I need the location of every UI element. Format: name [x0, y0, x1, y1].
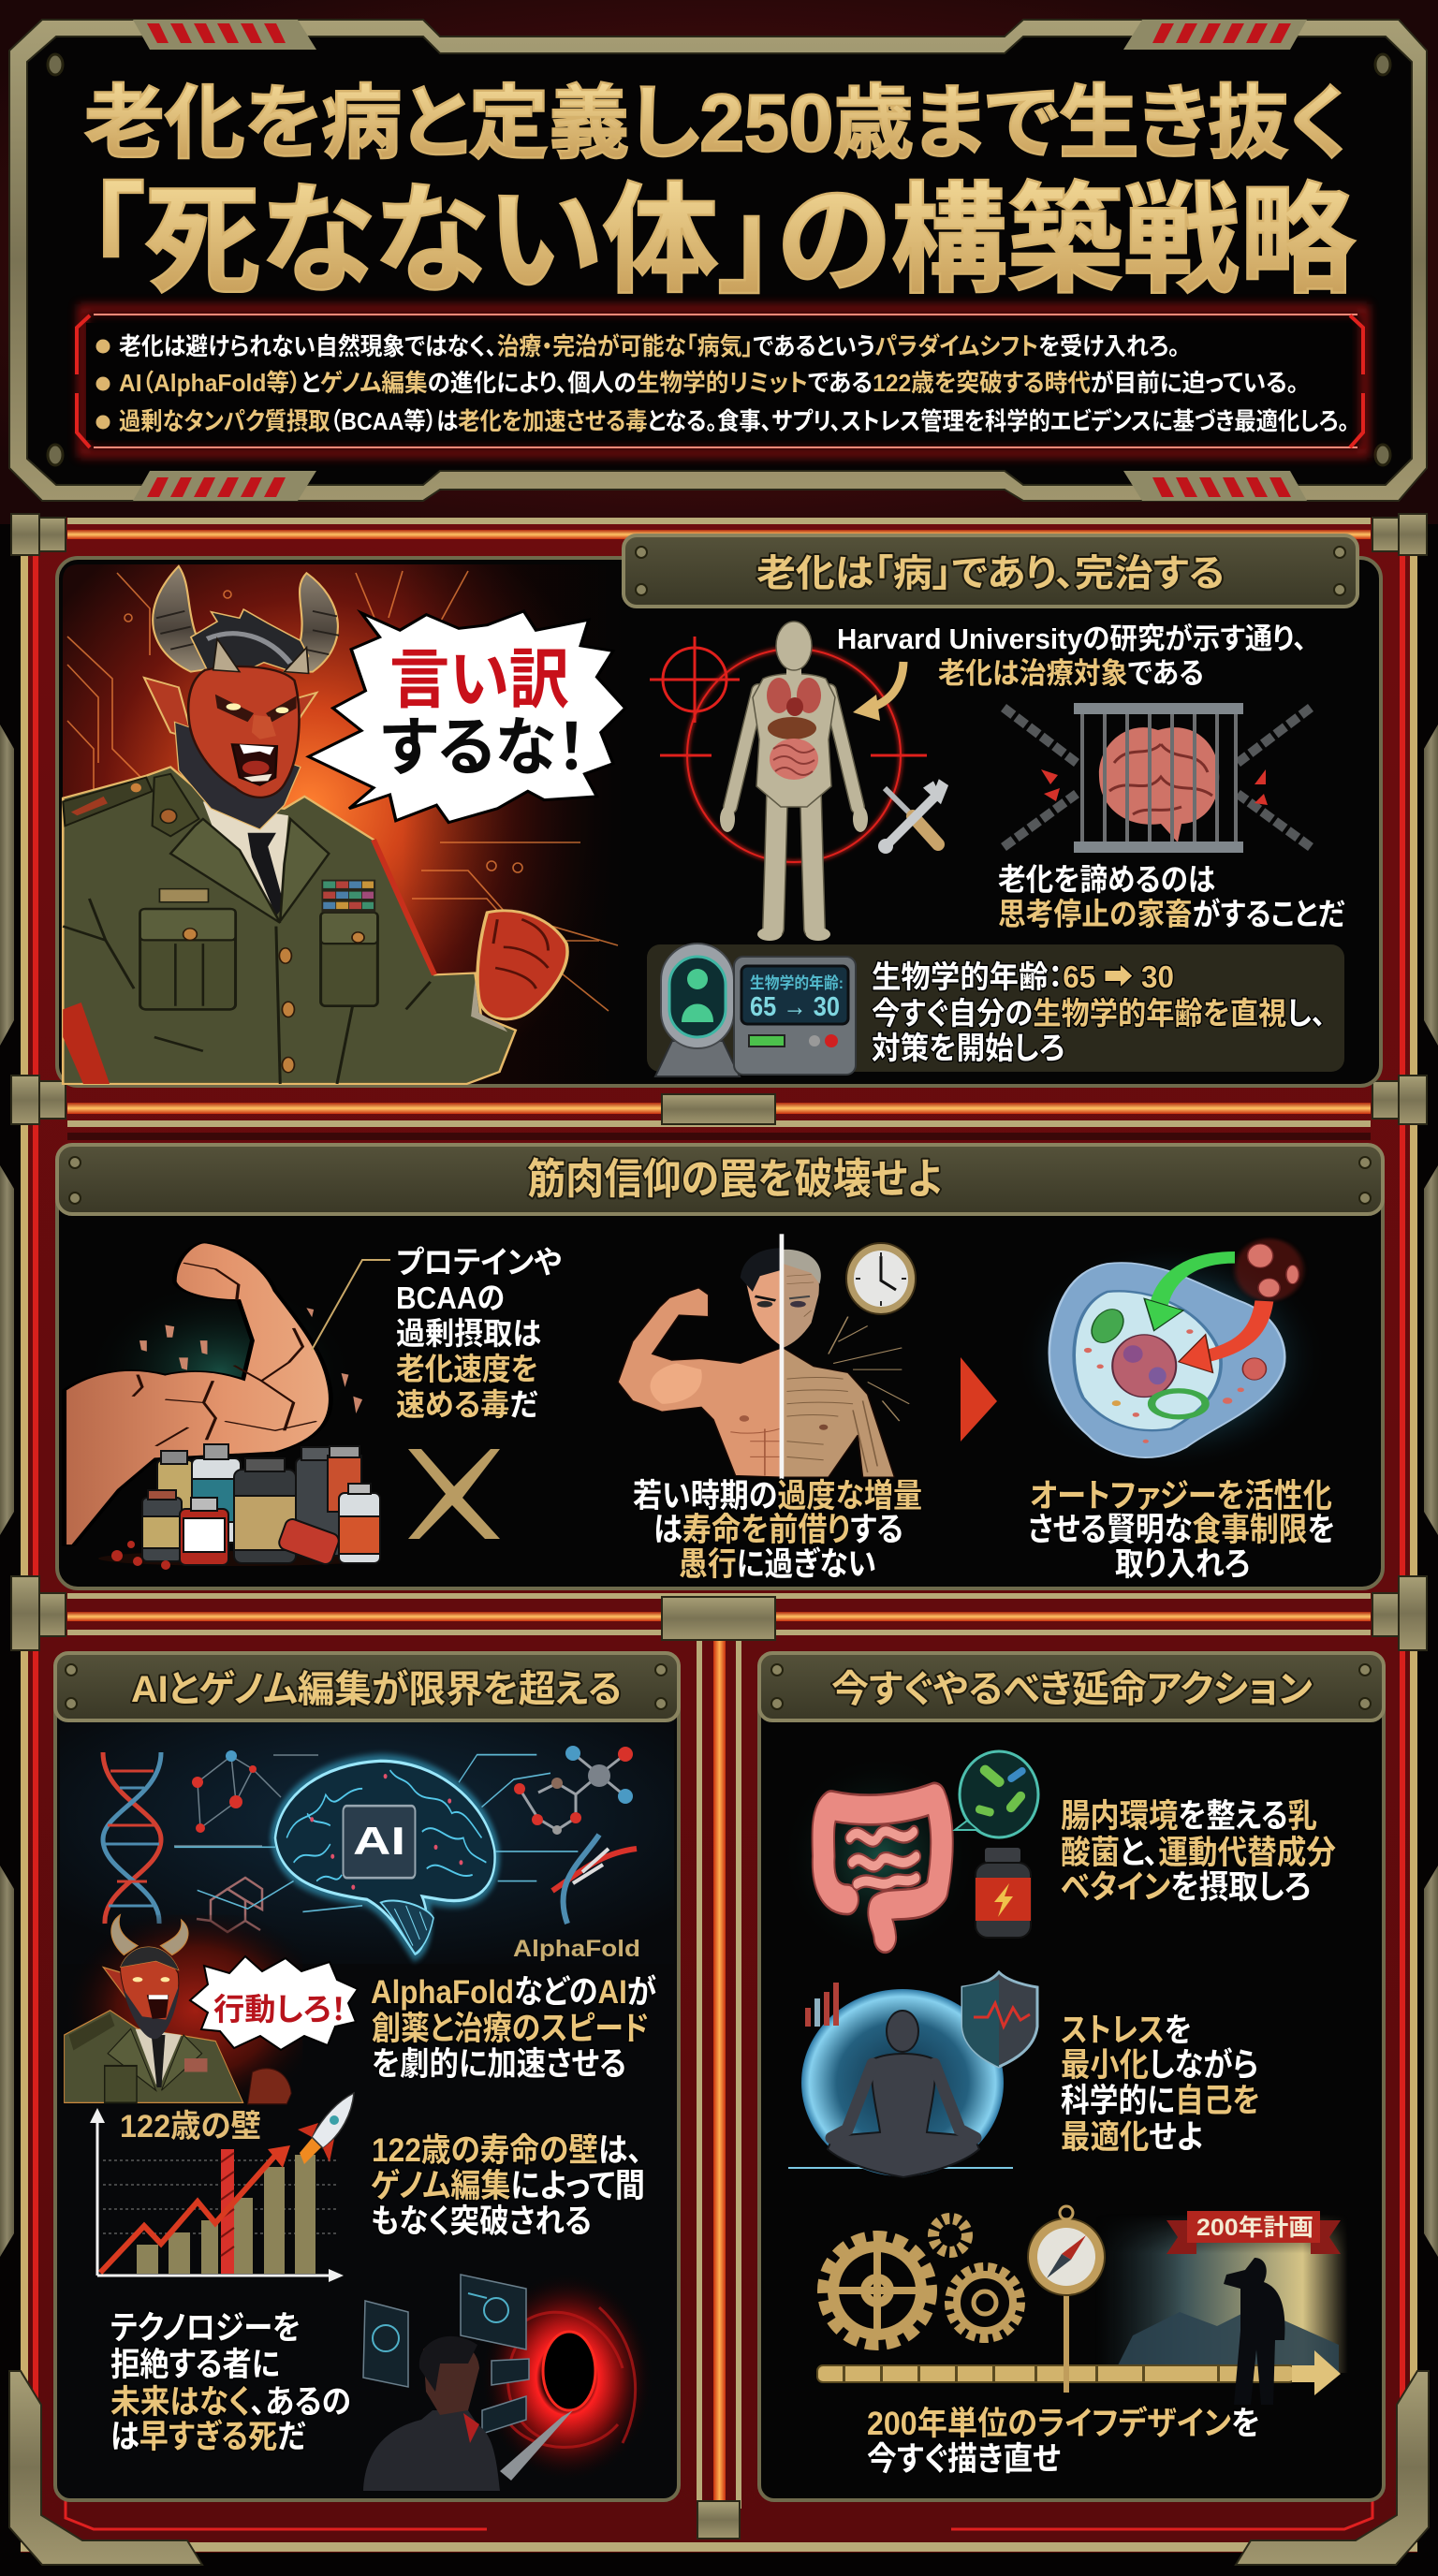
summary box: [77, 309, 1365, 453]
banner: 200-year plan: [1167, 2211, 1341, 2254]
icon: cracking muscular arm: [65, 1243, 362, 1545]
icon: age scanner: 生物学的年齢:: [750, 973, 844, 992]
callout: biological age: [647, 944, 1344, 1076]
beard: [174, 722, 301, 829]
icon: supplement jar: [976, 1848, 1031, 1938]
speech bubble: take action: [190, 1956, 358, 2050]
panel: AI and genome editing: [55, 1653, 679, 2500]
leader line: [312, 1260, 390, 1350]
pockets: [140, 909, 236, 1009]
text: giving up on aging: 思考停止の家畜がすることだ: [998, 897, 1345, 931]
header metal frame: [9, 20, 1427, 501]
text: protein warning: BCAAの: [396, 1281, 505, 1315]
callout: biological age: 対策を開始しろ: [872, 1031, 1064, 1065]
body: [730, 691, 858, 929]
chart: 122-year wall: [90, 2108, 344, 2282]
illustration: landscape timeline: [817, 2206, 1348, 2405]
section heading tab 1: [624, 535, 1357, 607]
section heading tab 1: 老化は「病」であり、完治する: [756, 553, 1225, 594]
icon: age scanner: [655, 944, 856, 1076]
text: Harvard research: [837, 622, 1307, 690]
hazard stripes: [133, 20, 1307, 501]
shirt and tie: [203, 801, 288, 905]
icon: molecules and DNA strand: [514, 1746, 637, 1924]
title: 老化を病と定義し250歳まで生き抜く: [84, 79, 1348, 168]
ai illustration backdrop: [60, 1720, 674, 1964]
text: protein warning: 老化速度を: [396, 1352, 538, 1386]
horns: [153, 566, 213, 672]
icon: molecular network: [174, 1750, 318, 1932]
text: 122 wall: もなく突破される: [371, 2203, 592, 2240]
icon: timeline arrow: [817, 2350, 1341, 2395]
banner: 200-year plan: 200年計画: [1196, 2215, 1313, 2241]
summary box: 老化は避けられない自然現象ではなく、治療・完治が可能な「病気」であるというパラダイムシフトを受け入れろ。: [119, 332, 1180, 360]
text: gut and betaine: 酸菌と、運動代替成分: [1061, 1835, 1336, 1871]
text: 122 wall: [371, 2132, 645, 2240]
text: giving up on aging: [998, 862, 1345, 931]
section heading tab 3: AIとゲノム編集が限界を超える: [131, 1669, 622, 1710]
icon: wall clock: [846, 1243, 916, 1314]
text: gut and betaine: [1061, 1798, 1336, 1906]
frame corner plates: [9, 514, 1429, 2565]
text: rejecting technology: 拒絶する者に: [110, 2347, 280, 2383]
callout: biological age: 生物学的年齢：65 ➡ 30: [872, 959, 1174, 994]
text: AlphaFold speed: を劇的に加速させる: [372, 2046, 626, 2083]
text: caption autophagy: [1028, 1478, 1335, 1583]
fist: [477, 911, 567, 1019]
speech bubble: take action: 行動しろ！: [213, 1992, 346, 2027]
text: rejecting technology: [110, 2310, 351, 2455]
icon: intestines: [779, 1751, 980, 1961]
panel: aging is a disease: [57, 535, 1381, 1086]
icon: supplement bottles: [98, 1444, 380, 1570]
summary box: AI（AlphaFold等）とゲノム編集の進化により、個人の生物学的リミットである122歳を突破する時代が目前に迫っている。: [119, 369, 1299, 397]
text: rejecting technology: は早すぎる死だ: [110, 2419, 306, 2455]
text: stress: 最小化しながら: [1061, 2047, 1258, 2084]
speech burst: するな！: [381, 712, 587, 783]
illustration: man before black hole: [363, 2273, 653, 2491]
text: caption excess bulking: は寿命を前借りする: [653, 1512, 903, 1548]
text: Harvard research: 老化は治療対象である: [938, 657, 1204, 690]
ears: [144, 678, 193, 739]
illustration: shouting devil officer: [63, 564, 625, 1084]
text: gut and betaine: 腸内環境を整える乳: [1061, 1798, 1317, 1835]
icon: gears: [824, 2218, 1020, 2344]
title: 「死なない体」の構築戦略: [86, 174, 1356, 308]
icon: age scanner: 65 → 30: [750, 992, 840, 1022]
text: 200-year life design: 200年単位のライフデザインを: [867, 2405, 1260, 2442]
text: protein warning: プロテインや: [396, 1245, 562, 1280]
text: protein warning: 速める毒だ: [396, 1387, 538, 1422]
panel: life extension actions: [759, 1653, 1384, 2500]
icon: human anatomy with targeting reticle: [650, 622, 927, 941]
text: stress: 最適化せよ: [1061, 2119, 1203, 2156]
icon: probiotic bubble: [955, 1751, 1038, 1837]
section heading tab 4: [759, 1653, 1384, 1720]
icon: shield: [962, 1972, 1037, 2067]
icon: wrench and screwdriver: [878, 783, 946, 854]
text: caption excess bulking: 愚行に過ぎない: [679, 1546, 876, 1583]
text: AlphaFold label: AlphaFold: [513, 1936, 640, 1962]
text: caption autophagy: オートファジーを活性化: [1030, 1478, 1332, 1515]
text: protein warning: [396, 1245, 562, 1422]
text: caption autophagy: 取り入れろ: [1115, 1546, 1250, 1583]
icon: DNA helix: [103, 1752, 161, 1924]
icon: glowing AI brain: [174, 1755, 578, 1954]
section heading tab 4: 今すぐやるべき延命アクション: [831, 1669, 1313, 1710]
summary box: 過剰なタンパク質摂取（BCAA等）は老化を加速させる毒となる。食事、サプリ、ストレス管理を科学的エビデンスに基づき最適化しろ。: [119, 407, 1349, 435]
section heading tab 3: [55, 1653, 679, 1720]
medals: [321, 880, 375, 913]
icon: meditating figure in orb: [788, 1983, 1013, 2177]
side plates: [0, 724, 1438, 2257]
speech burst: 言い訳: [389, 643, 569, 716]
arrow: red chevron: [961, 1357, 997, 1442]
icon: caged brain with chains: [1004, 703, 1311, 853]
section heading tab 2: [57, 1145, 1383, 1214]
text: 122 wall: ゲノム編集によって間: [371, 2168, 645, 2204]
text: 200-year life design: [867, 2405, 1260, 2478]
icon: curved gold arrow: [853, 662, 903, 721]
icon: rocket: [298, 2093, 354, 2164]
section heading tab 2: 筋肉信仰の罠を破壊せよ: [527, 1155, 942, 1203]
text: stress: 科学的に自己を: [1061, 2083, 1260, 2119]
text: caption autophagy: させる賢明な食事制限を: [1028, 1512, 1335, 1548]
icon: autophagy cell: [1015, 1238, 1328, 1472]
text: giving up on aging: 老化を諦めるのは: [998, 862, 1215, 897]
text: stress: [1061, 2012, 1260, 2156]
devil uniform: [63, 767, 516, 1084]
icon: compass on pole: [1028, 2206, 1105, 2393]
illustration: small devil officer: [65, 1915, 302, 2106]
chart: 122-year wall: 122歳の壁: [120, 2109, 261, 2144]
title: [84, 79, 1356, 308]
panel: destroy the muscle myth: [57, 1145, 1383, 1588]
callout: biological age: 今すぐ自分の生物学的年齢を直視し、: [872, 996, 1326, 1031]
icon: silhouette man: [1224, 2258, 1284, 2405]
hair: [191, 609, 309, 672]
text: protein warning: 過剰摂取は: [396, 1316, 541, 1351]
text: rejecting technology: 未来はなく、あるの: [110, 2384, 351, 2421]
face: [188, 666, 300, 798]
speech burst: [309, 611, 625, 823]
text: AlphaFold speed: [371, 1974, 656, 2083]
main frame background: [21, 518, 1417, 2553]
text: AlphaFold speed: 創薬と治療のスピード: [372, 2011, 649, 2047]
text: gut and betaine: ベタインを摂取しろ: [1061, 1869, 1311, 1906]
icon: young versus aged body: [618, 1234, 909, 1479]
text: caption excess bulking: 若い時期の過度な増量: [633, 1478, 922, 1515]
text: rejecting technology: テクノロジーを: [110, 2310, 301, 2347]
text: AI chip label: AI: [353, 1819, 405, 1863]
text: 200-year life design: 今すぐ描き直せ: [867, 2441, 1061, 2478]
text: caption excess bulking: [633, 1478, 922, 1583]
text: Harvard research: Harvard Universityの研究が示す通り、: [837, 622, 1307, 655]
text: 122 wall: 122歳の寿命の壁は、: [372, 2132, 642, 2169]
icon: gold X mark: [408, 1449, 500, 1539]
text: stress: ストレスを: [1061, 2012, 1192, 2049]
header panel: [9, 20, 1427, 501]
text: AlphaFold speed: AlphaFoldなどのAIが: [371, 1974, 656, 2011]
